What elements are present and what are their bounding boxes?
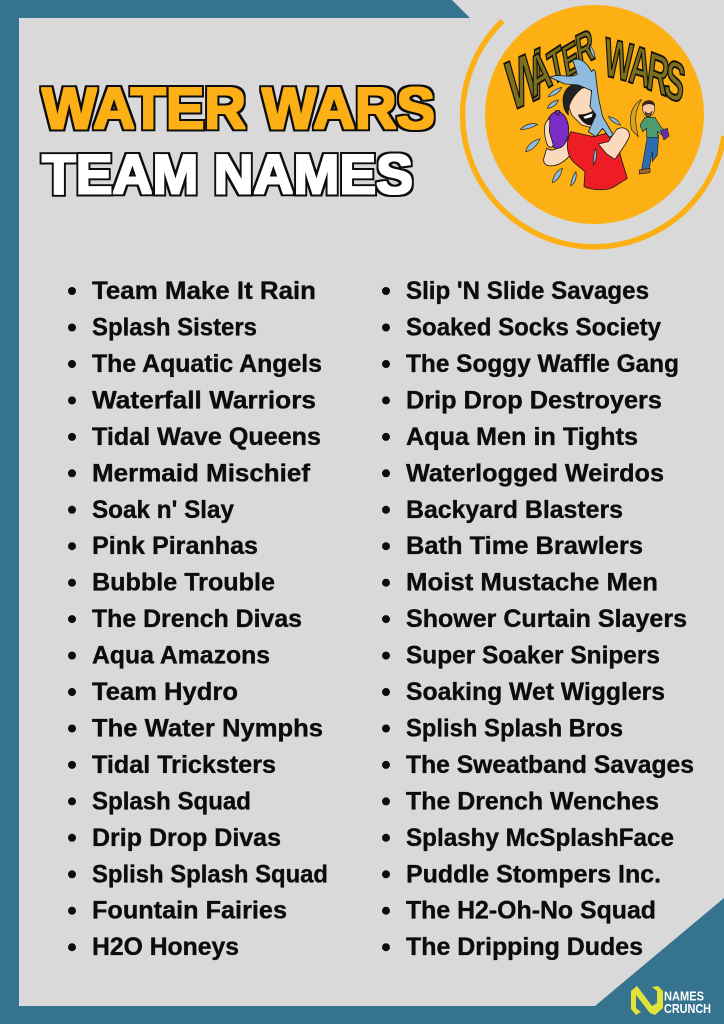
list: right column <box>382 277 694 961</box>
badge illustration <box>485 5 704 224</box>
title: WATER WARS <box>42 76 435 142</box>
list: left column: Pink Piranhas <box>92 532 258 560</box>
badge lettering: A <box>523 37 556 110</box>
list: left column: Splash Sisters <box>92 314 257 342</box>
main figure <box>544 59 629 190</box>
list: right column: Soaking Wet Wigglers <box>406 678 665 706</box>
orange ring <box>463 21 724 247</box>
list: left column: Tidal Wave Queens <box>92 423 321 451</box>
list: left column: Soak n' Slay <box>92 496 234 524</box>
list: left column: Team Hydro <box>92 678 238 706</box>
list: left column: Mermaid Mischief <box>92 459 311 487</box>
list: right column: Splashy McSplashFace <box>406 824 674 852</box>
logo: Names Crunch: CRUNCH <box>664 1002 711 1016</box>
list: left column: Splish Splash Squad <box>92 860 328 888</box>
list: right column: Puddle Stompers Inc. <box>406 860 661 888</box>
list: right column: The Dripping Dudes <box>406 933 643 961</box>
list: left column: Team Make It Rain <box>92 277 316 305</box>
list: right column: The Drench Wenches <box>406 787 659 815</box>
list: left column: Bubble Trouble <box>92 569 275 597</box>
badge lettering: R <box>572 19 597 76</box>
list: left column: Fountain Fairies <box>92 897 287 925</box>
badge lettering: W <box>502 34 549 127</box>
list: right column: The Soggy Waffle Gang <box>406 350 679 378</box>
title: TEAM NAMES <box>42 142 413 206</box>
badge lettering <box>502 19 689 127</box>
list: right column: Backyard Blasters <box>406 496 623 524</box>
list: right column: Drip Drop Destroyers <box>406 386 662 414</box>
logo: Names Crunch: NAMES <box>664 990 704 1004</box>
logo: Names Crunch <box>631 986 711 1016</box>
list: left column <box>68 277 328 961</box>
list: right column: Splish Splash Bros <box>406 714 623 742</box>
list: right column: Aqua Men in Tights <box>406 423 638 451</box>
list: left column: Splash Squad <box>92 787 251 815</box>
water drops <box>520 45 621 186</box>
list: right column: Super Soaker Snipers <box>406 642 660 670</box>
list: left column: The Drench Divas <box>92 605 302 633</box>
small running man <box>630 99 669 174</box>
list: left column: Waterfall Warriors <box>92 386 316 414</box>
badge lettering: T <box>544 36 569 96</box>
list: left column: Drip Drop Divas <box>92 824 281 852</box>
badge lettering: R <box>644 41 672 109</box>
list: right column: Soaked Socks Society <box>406 314 661 342</box>
badge lettering: A <box>627 34 654 101</box>
list: left column: The Aquatic Angels <box>92 350 322 378</box>
list: right column: Shower Curtain Slayers <box>406 605 687 633</box>
badge lettering: E <box>559 30 583 88</box>
badge lettering: W <box>602 27 635 95</box>
list: right column: Moist Mustache Men <box>406 569 658 597</box>
list: right column: Bath Time Brawlers <box>406 532 643 560</box>
list: left column: H2O Honeys <box>92 933 239 961</box>
list: right column: The H2-Oh-No Squad <box>406 897 656 925</box>
list: left column: Tidal Tricksters <box>92 751 276 779</box>
list: right column: Waterlogged Weirdos <box>406 459 664 487</box>
list: left column: Aqua Amazons <box>92 642 270 670</box>
badge lettering: S <box>661 48 689 116</box>
list: right column: Slip 'N Slide Savages <box>406 277 649 305</box>
title <box>42 76 435 206</box>
list: right column: The Sweatband Savages <box>406 751 694 779</box>
list: left column: The Water Nymphs <box>92 714 323 742</box>
